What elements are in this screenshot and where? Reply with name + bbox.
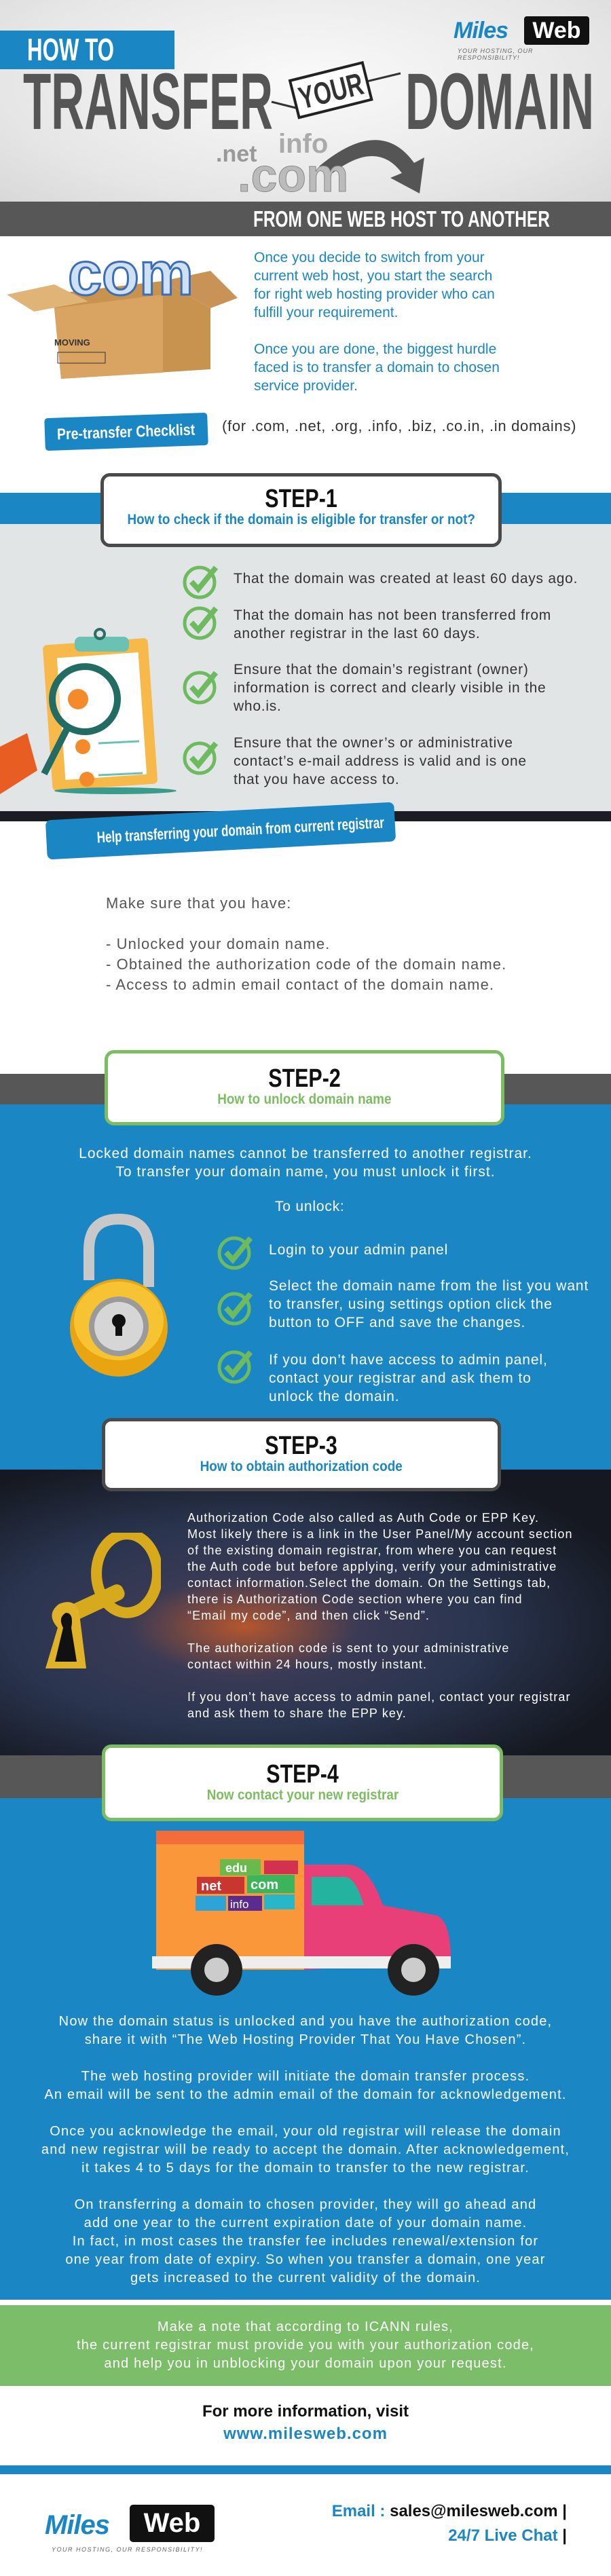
step-4 heading box — [102, 1744, 503, 1821]
logo: footer MilesWeb — [45, 2505, 215, 2553]
text: to unlock: To unlock: — [275, 1199, 345, 1214]
checklist: step-2 items: If you don’t have access to admin panel, — [269, 1352, 548, 1368]
hero background — [0, 0, 611, 202]
text: step-4 paragraphs: Once you acknowledge the email, your old registrar will release the domain — [50, 2124, 561, 2139]
heading: HOW TO: HOW TO — [27, 32, 114, 67]
callout: ICANN note: the current registrar must provide you with your authorization code, — [77, 2338, 534, 2353]
title: Transfer your domain: info — [278, 129, 328, 159]
text: intro paragraphs: faced is to transfer a domain to chosen — [254, 360, 500, 375]
icon: delivery truck with domain signs: net — [201, 1879, 221, 1894]
title: Transfer your domain: .com — [238, 149, 348, 202]
text: make sure list — [106, 895, 506, 993]
text: step-4 paragraphs: share it with “The Web Hosting Provider That You Have Chosen”. — [85, 2032, 526, 2047]
check icon 3 — [183, 671, 218, 705]
checklist: step-1 items: another registrar in the last 60 days. — [234, 626, 481, 641]
text: more information — [202, 2402, 409, 2443]
checklist: step-1 items: That the domain has not been transferred from — [234, 608, 551, 623]
logo: MilesWeb header — [453, 16, 589, 61]
checklist: step-1 items: that you have access to. — [234, 772, 399, 787]
check icon a — [217, 1237, 253, 1269]
text: intro paragraphs — [254, 250, 500, 394]
text: locked domain intro: To transfer your domain name, you must unlock it first. — [115, 1164, 496, 1180]
step-3 heading box: How to obtain authorization code — [200, 1459, 403, 1474]
icon: delivery truck with domain signs: info — [230, 1898, 248, 1911]
step-2 heading box: How to unlock domain name — [217, 1091, 392, 1107]
checklist: step-1 items: who.is. — [234, 698, 282, 714]
icon: moving box with .com — [7, 240, 238, 379]
step-3 heading box — [102, 1418, 501, 1491]
heading: HOW TO — [0, 31, 174, 69]
step-1 heading box — [100, 473, 502, 547]
text: authorization code: the Auth code but before applying, verify your administrative — [187, 1560, 557, 1573]
checklist: step-1 items: information is correct and clearly visible in the — [234, 680, 546, 696]
text: step-4 paragraphs: The web hosting provider will initiate the domain transfer process. — [81, 2069, 530, 2084]
callout: ICANN note — [0, 2305, 611, 2386]
logo: footer MilesWeb: Web — [144, 2508, 200, 2538]
divider bar — [0, 2465, 611, 2474]
logo: footer MilesWeb: Miles — [45, 2510, 109, 2540]
title: Transfer your domain — [23, 58, 594, 202]
text: step-4 paragraphs: it takes 4 to 5 days for the domain to transfer to the new registrar. — [81, 2161, 530, 2176]
label: pre-transfer checklist: Pre-transfer Checklist — [57, 420, 196, 443]
text: authorization code: there is Authorization Code section where you can find — [187, 1592, 523, 1606]
text: authorization code: “Email my code”, and then click “Send”. — [187, 1609, 430, 1622]
label: help transferring — [45, 802, 396, 859]
text: authorization code: Most likely there is a link in the User Panel/My account section — [187, 1527, 573, 1541]
step-1 heading box: STEP-1 — [265, 485, 337, 513]
icon: delivery truck with domain signs: com — [251, 1878, 278, 1892]
text: intro paragraphs: Once you are done, the biggest hurdle — [254, 341, 496, 357]
text: locked domain intro — [79, 1146, 532, 1180]
band: from one web host to another — [0, 202, 611, 236]
text: make sure list: - Obtained the authorization code of the domain name. — [106, 956, 506, 973]
checklist: step-1 items — [183, 566, 578, 787]
checklist: step-2 items: unlock the domain. — [269, 1389, 399, 1404]
panel: step-2 background — [0, 1074, 611, 1470]
checklist: step-2 items: contact your registrar and ask them to — [269, 1370, 532, 1386]
text: contact info: Email : sales@milesweb.com | — [332, 2502, 567, 2520]
check icon 4 — [183, 741, 218, 775]
text: step-4 paragraphs: add one year to the current expiration date of your domain name. — [84, 2216, 527, 2230]
text: step-4 paragraphs: and new registrar will be ready to accept the domain. After acknowledgement, — [41, 2142, 570, 2157]
checklist: step-2 items: Login to your admin panel — [269, 1242, 448, 1258]
text: authorization code — [187, 1511, 573, 1720]
text: step-4 paragraphs: one year from date of expiry. So when you transfer a domain, one year — [65, 2252, 546, 2267]
text: intro paragraphs: service provider. — [254, 378, 358, 394]
panel: step-1 — [0, 493, 611, 821]
text: step-4 paragraphs: In fact, in most cases the transfer fee includes renewal/extension for — [73, 2234, 538, 2249]
title: Transfer your domain: .net — [216, 141, 257, 167]
step-3 heading box: STEP-3 — [265, 1432, 337, 1460]
check icon 2 — [183, 607, 218, 639]
text: authorization code: and ask them to share the EPP key. — [187, 1706, 407, 1720]
icon: moving box with .com: MOVING — [54, 337, 90, 348]
text: more information: www.milesweb.com — [223, 2425, 388, 2443]
checklist: step-1 items: That the domain was created at least 60 days ago. — [234, 571, 578, 586]
step-2 heading box — [105, 1050, 504, 1125]
panel: step-4 background — [0, 1755, 611, 2300]
step-4 heading box: Now contact your new registrar — [206, 1787, 399, 1803]
logo: footer MilesWeb: YOUR HOSTING, OUR RESPONSIBILITY! — [52, 2546, 203, 2553]
text: authorization code: The authorization code is sent to your administrative — [187, 1641, 510, 1655]
icon: delivery truck with domain signs — [152, 1831, 451, 1996]
band: from one web host to another: FROM ONE WEB HOST TO ANOTHER — [253, 206, 550, 231]
text: more information: For more information, visit — [202, 2402, 409, 2421]
title: Transfer your domain: YOUR — [295, 66, 367, 116]
icon: golden key — [45, 1533, 161, 1668]
panel: step-3 dark background — [0, 1470, 611, 1755]
text: intro paragraphs: Once you decide to switch from your — [254, 250, 485, 265]
text: intro paragraphs: fulfill your requirement. — [254, 305, 398, 320]
text: authorization code: contact within 24 hours, mostly instant. — [187, 1658, 427, 1671]
label: pre-transfer checklist — [44, 413, 208, 451]
text: step-4 paragraphs — [41, 2014, 570, 2285]
text: make sure list: Make sure that you have: — [106, 895, 291, 912]
text: step-4 paragraphs: An email will be sent to the admin email of the domain for acknowledgement. — [44, 2087, 567, 2102]
logo: MilesWeb header: Miles — [453, 18, 508, 43]
checklist: step-2 items: Select the domain name from the list you want — [269, 1278, 589, 1294]
text: contact info: 24/7 Live Chat | — [448, 2526, 567, 2545]
icon: padlock — [70, 1214, 168, 1377]
logo: MilesWeb header: Web — [532, 18, 581, 43]
text: make sure list: - Access to admin email contact of the domain name. — [106, 976, 494, 993]
text: authorization code: of the existing domain registrar, from where you can request — [187, 1544, 557, 1557]
callout: ICANN note: and help you in unblocking your domain upon your request. — [104, 2356, 507, 2371]
callout: ICANN note: Make a note that according to ICANN rules, — [158, 2319, 453, 2334]
text: intro paragraphs: current web host, you start the search — [254, 268, 492, 284]
title: Transfer your domain: TRANSFER — [23, 58, 273, 147]
checklist: step-1 items: Ensure that the domain’s registrant (owner) — [234, 662, 529, 677]
check icon c — [217, 1351, 253, 1383]
text: step-4 paragraphs: On transferring a domain to chosen provider, they will go ahead and — [75, 2197, 536, 2212]
icon: delivery truck with domain signs: edu — [225, 1861, 247, 1875]
step-4 heading box: STEP-4 — [266, 1760, 339, 1789]
checklist: step-2 items — [217, 1237, 589, 1404]
text: step-4 paragraphs: Now the domain status is unlocked and you have the authorization code, — [59, 2014, 552, 2029]
icon: clipboard with magnifier — [0, 628, 177, 794]
checklist: step-2 items: button to OFF and save the changes. — [269, 1315, 525, 1330]
text: authorization code: If you don’t have access to admin panel, contact your registrar — [187, 1690, 571, 1704]
check icon b — [217, 1292, 253, 1325]
text: domain list: (for .com, .net, .org, .info, .biz, .co.in, .in domains) — [222, 417, 576, 434]
text: step-4 paragraphs: gets increased to the current validity of the domain. — [130, 2271, 481, 2285]
label: help transferring: Help transferring your domain from current registrar — [96, 813, 384, 846]
text: contact info — [332, 2502, 567, 2545]
text: intro paragraphs: for right web hosting provider who can — [254, 286, 495, 302]
text: make sure list: - Unlocked your domain name. — [106, 935, 330, 952]
step-2 heading box: STEP-2 — [268, 1064, 341, 1093]
checklist: step-1 items: Ensure that the owner’s or administrative — [234, 735, 513, 751]
check icon 1 — [183, 566, 218, 599]
text: locked domain intro: Locked domain names cannot be transferred to another registrar. — [79, 1146, 532, 1161]
logo: MilesWeb header: YOUR HOSTING, OUR RESPONSIBILITY! — [458, 48, 534, 61]
step-1 heading box: How to check if the domain is eligible for transfer or not? — [127, 512, 475, 527]
checklist: step-2 items: to transfer, using settings option click the — [269, 1296, 553, 1312]
text: authorization code: contact information.Select the domain. On the Settings tab, — [187, 1576, 551, 1590]
text: authorization code: Authorization Code also called as Auth Code or EPP Key. — [187, 1511, 539, 1525]
icon: moving box with .com: com — [68, 240, 193, 308]
checklist: step-1 items: contact’s e-mail address is valid and is one — [234, 753, 527, 769]
